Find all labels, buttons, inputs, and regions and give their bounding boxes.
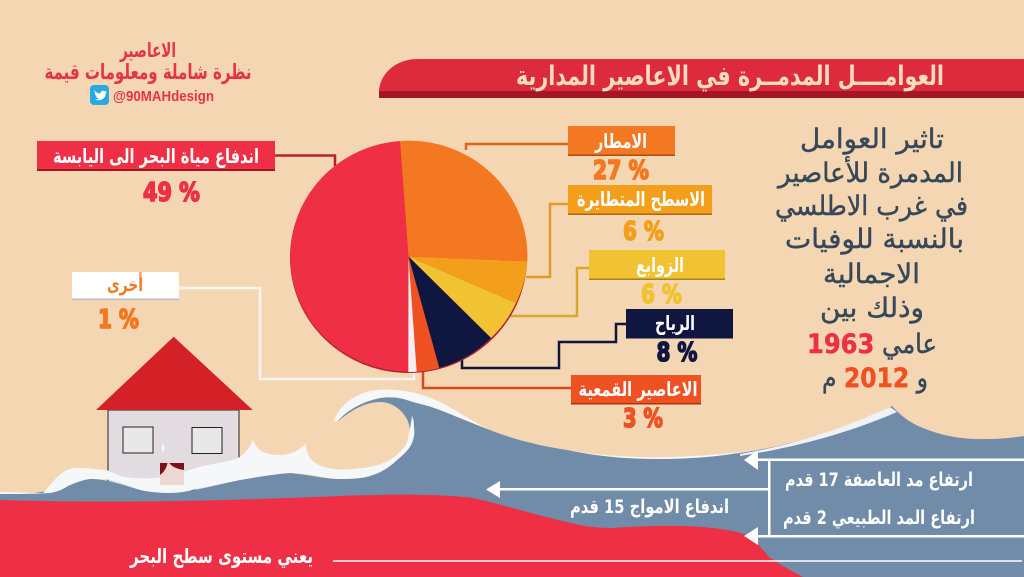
callout: other: 1 % — [98, 305, 139, 335]
callout: winds: 8 % — [656, 338, 698, 368]
sea level line — [333, 560, 1022, 562]
large wave body — [0, 397, 1024, 577]
house roof — [96, 337, 253, 410]
description text block: وذلك بين — [820, 293, 924, 324]
right window — [192, 428, 222, 454]
foam droplet — [162, 444, 164, 452]
callout: storm surge: 49 % — [143, 178, 200, 208]
description text block: تاثير العوامل — [800, 124, 944, 155]
slice: rain 27% — [400, 141, 527, 261]
description text block: الاجمالية — [823, 259, 920, 290]
pie chart — [290, 141, 527, 373]
trough foam — [567, 450, 747, 459]
label: storm tide: ارتفاع مد العاصفة 17 قدم — [785, 469, 973, 491]
callout: rain — [568, 126, 675, 186]
description text block: المدمرة للأعاصير — [776, 155, 963, 189]
slice: winds 8% — [408, 256, 491, 368]
label: wave run-up: اندفاع الامواج 15 قدم — [570, 496, 729, 518]
brand header — [44, 38, 252, 105]
title banner — [379, 59, 1024, 98]
foam band — [0, 416, 414, 494]
arrow: wave run-up — [486, 481, 769, 498]
callout: storm surge — [37, 141, 275, 208]
arrow: normal tide — [744, 527, 1024, 545]
slice: surf 6% — [408, 256, 527, 303]
slice: tornadoes 3% — [408, 256, 439, 372]
callout: winds — [626, 309, 733, 368]
slice: corners 6% — [408, 256, 516, 338]
connector lines — [179, 144, 626, 388]
arrow: storm tide height — [744, 450, 1024, 470]
callout: surf: 6 % — [623, 217, 664, 247]
description text block: و 2012 م — [822, 363, 928, 394]
slice: other 1% — [408, 256, 417, 372]
bracket line — [768, 459, 770, 537]
callout: corners — [589, 250, 725, 310]
label: sea level: يعني مستوى سطح البحر — [129, 544, 313, 569]
house wall — [108, 410, 239, 490]
land — [0, 495, 803, 577]
submerged door foam — [160, 460, 184, 485]
callout: rain: 27 % — [593, 156, 649, 186]
description text block — [775, 124, 968, 394]
brand header: نظرة شاملة ومعلومات قيمة — [44, 60, 252, 84]
brand header: الاعاصير — [119, 38, 176, 62]
callout: other: أخرى — [107, 272, 143, 296]
callout: surf — [568, 185, 712, 247]
callout: tornadoes — [571, 375, 701, 434]
callout: tornadoes: 3 % — [623, 404, 663, 434]
callout: other — [72, 272, 179, 335]
callout: storm surge: اندفاع مياة البحر الى اليابسة — [53, 144, 259, 168]
callout: tornadoes: الاعاصير القمعية — [578, 377, 698, 401]
callout: corners: الزوابع — [636, 253, 684, 277]
house — [96, 337, 253, 490]
description text block: بالنسبة للوفيات — [785, 224, 964, 255]
callout: rain: الامطار — [594, 129, 647, 153]
sea water — [0, 390, 1024, 577]
brand header: @90MAHdesign — [113, 88, 214, 105]
door — [160, 463, 184, 483]
wave crest foam — [334, 390, 567, 450]
slice: storm surge 49% — [290, 141, 408, 372]
callout: surf: الاسطح المتطايرة — [577, 187, 705, 211]
second crest foam — [740, 407, 897, 456]
callout: corners: 6 % — [641, 280, 682, 310]
callout: winds: الرياح — [655, 311, 695, 335]
label: normal tide: ارتفاع المد الطبيعي 2 قدم — [783, 507, 975, 529]
description text block: عامي 1963 — [807, 329, 937, 360]
left window — [123, 427, 153, 453]
description text block: في غرب الاطلسي — [775, 191, 968, 222]
